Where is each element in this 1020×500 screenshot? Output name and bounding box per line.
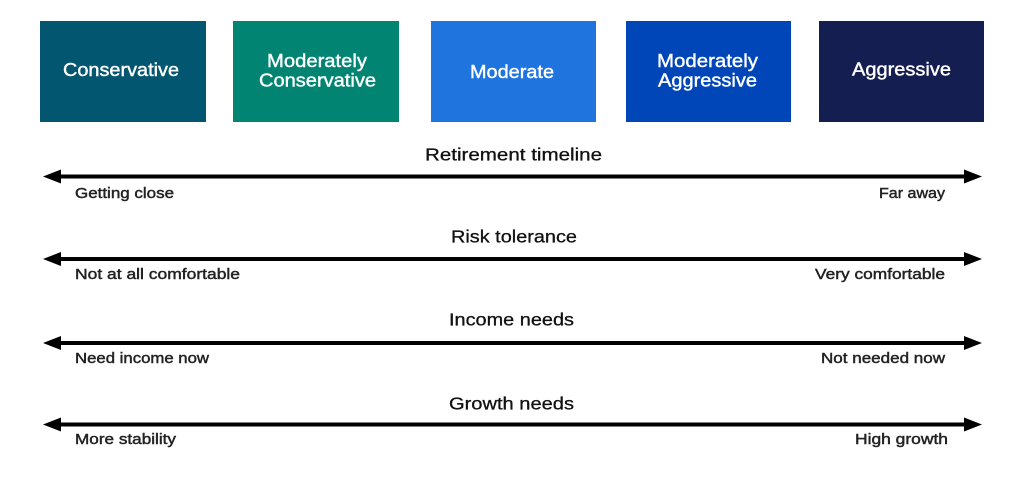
panel: Moderate: Moderate <box>470 62 554 82</box>
panel: Moderately Aggressive: Moderately <box>657 51 758 71</box>
label: Not needed now: Not needed now <box>821 350 945 367</box>
panel: Aggressive: Aggressive <box>852 60 951 80</box>
arrow: Risk tolerance <box>43 252 982 266</box>
panel: Aggressive <box>819 21 984 122</box>
arrow: Retirement timeline <box>43 170 982 184</box>
heading: Risk tolerance: Risk tolerance <box>451 226 577 246</box>
panel: Moderately Conservative <box>233 21 399 122</box>
panel: Conservative: Conservative <box>63 60 179 80</box>
label: High growth: High growth <box>855 431 948 448</box>
label: More stability: More stability <box>75 431 177 448</box>
scale: Risk tolerance <box>43 226 982 283</box>
panel: Moderately Conservative: Conservative <box>259 70 376 90</box>
heading: Growth needs: Growth needs <box>449 394 574 414</box>
label: Getting close: Getting close <box>75 185 174 202</box>
heading: Retirement timeline: Retirement timeline <box>425 144 602 164</box>
panel: Moderately Aggressive <box>626 21 791 122</box>
arrow: Growth needs <box>43 418 982 432</box>
heading: Income needs: Income needs <box>449 310 574 330</box>
label: Very comfortable: Very comfortable <box>815 266 945 283</box>
scale: Income needs <box>43 310 982 367</box>
panel: Moderately Conservative: Moderately <box>267 51 367 71</box>
label: Far away: Far away <box>879 185 946 202</box>
scale: Retirement timeline <box>43 144 982 202</box>
label: Not at all comfortable: Not at all comfortable <box>75 266 240 283</box>
panel: Moderate <box>431 21 596 122</box>
panel: Moderately Aggressive: Aggressive <box>658 70 757 90</box>
label: Need income now: Need income now <box>75 350 209 367</box>
scale: Growth needs <box>43 394 982 448</box>
arrow: Income needs <box>43 336 982 350</box>
panel: Conservative <box>40 21 206 122</box>
